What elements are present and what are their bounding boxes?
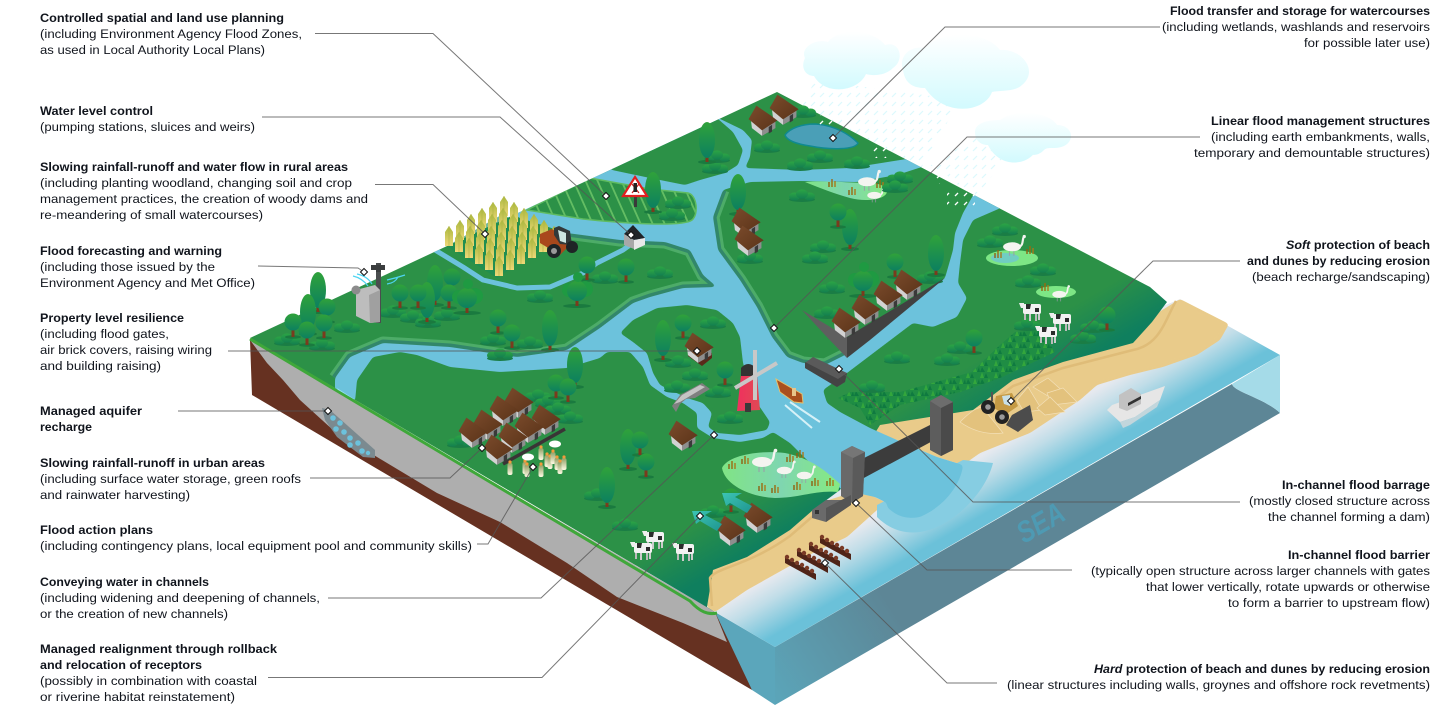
cows <box>630 303 1071 561</box>
text: slowing runoff rural: Slowing rainfall-runoff and water flow in rural areas <box>40 160 348 174</box>
text: flood barrage: In-channel flood barrage <box>1282 478 1430 492</box>
text: soft protection <box>1247 238 1430 284</box>
sea label: SEA <box>1011 496 1071 550</box>
parcel: striped field <box>527 178 696 224</box>
barrage tower: far <box>930 395 953 456</box>
grey rock layer <box>250 340 727 642</box>
text: flood transfer and storage: Flood transfer and storage for watercourses <box>1170 4 1430 18</box>
leader: forecasting <box>258 266 364 272</box>
sea: side facet <box>715 612 775 705</box>
leader: barrage <box>839 369 1240 502</box>
text: managed realignment: and relocation of receptors <box>40 658 202 672</box>
icon: reed beds by the coast <box>838 330 1055 425</box>
text: slowing runoff rural: re-meandering of small watercourses) <box>40 208 263 222</box>
leader: property resilience <box>228 350 697 352</box>
text: aquifer recharge: recharge <box>40 420 92 434</box>
icon: wheel loader <box>981 392 1033 432</box>
text: linear flood management <box>1194 114 1430 160</box>
outer fan <box>877 460 993 532</box>
text: managed realignment: or riverine habitat reinstatement) <box>40 690 235 704</box>
leader: aquifer recharge <box>178 410 328 412</box>
text: conveying water: or the creation of new channels) <box>40 607 228 621</box>
text: aquifer recharge <box>40 404 142 434</box>
text: linear flood management: temporary and demountable structures) <box>1194 146 1430 160</box>
text: flood barrier: (typically open structure across larger channels with gates <box>1091 564 1430 578</box>
rivers and channels <box>335 116 1003 518</box>
leader: rural runoff <box>375 184 485 234</box>
text: water level control <box>40 104 255 134</box>
text: managed realignment: Managed realignment through rollback <box>40 642 277 656</box>
sand heaps <box>960 378 1077 434</box>
text: flood transfer and storage: for possible later use) <box>1304 36 1430 50</box>
flood barrage <box>812 395 953 522</box>
text: soft protection: (beach recharge/sandscaping) <box>1252 270 1430 284</box>
river levees <box>335 190 845 378</box>
text: slowing runoff urban: and rainwater harvesting) <box>40 488 190 502</box>
text: water level control: Water level control <box>40 104 153 118</box>
text: flood forecasting: Flood forecasting and warning <box>40 244 222 258</box>
green land parcels <box>527 112 770 435</box>
text: flood barrier <box>1091 548 1430 610</box>
text: flood forecasting: (including those issued by the <box>40 260 215 274</box>
text: flood forecasting <box>40 244 255 290</box>
text: water level control: (pumping stations, sluices and weirs) <box>40 120 255 134</box>
text: hard protection: (linear structures including walls, groynes and offshore rock revetments) <box>1007 678 1430 692</box>
leader end markers <box>324 134 1014 566</box>
village road <box>503 429 565 464</box>
leader: spatial planning <box>315 34 606 196</box>
text: aquifer recharge: Managed aquifer <box>40 404 142 418</box>
text: slowing runoff urban: (including surface water storage, green roofs <box>40 472 301 486</box>
beach: south-west <box>705 490 887 612</box>
leader: barrier <box>856 503 1072 570</box>
barrage span <box>862 420 940 479</box>
icon: rollback arrows <box>692 493 752 531</box>
groynes <box>785 535 851 580</box>
leader: urban runoff <box>310 448 482 478</box>
wetland: small pool <box>1036 283 1076 301</box>
leader: soft protection <box>1011 261 1240 401</box>
parcel: river island <box>620 305 770 435</box>
wall: dark face <box>847 278 945 358</box>
text: flood forecasting: Environment Agency and Met Office) <box>40 276 255 290</box>
text: flood action plans: Flood action plans <box>40 523 153 537</box>
land surface <box>250 92 1167 612</box>
text: controlled spatial and land use planning: Controlled spatial and land use planning <box>40 11 284 25</box>
text: linear flood management: (including earth embankments, walls, <box>1211 130 1430 144</box>
demountable flood structure <box>805 357 847 387</box>
text: flood barrage: the channel forming a dam) <box>1268 510 1430 524</box>
front bright grass edge <box>250 339 717 614</box>
crop field <box>445 196 558 278</box>
leader: linear structures <box>774 137 1200 328</box>
wetland: upper river <box>805 170 887 202</box>
parcel: north-west <box>611 119 742 185</box>
text: flood barrage <box>1249 478 1430 524</box>
text: property resilience: Property level resilience <box>40 311 184 325</box>
wall: light face <box>802 310 847 358</box>
barrier control building <box>812 495 851 522</box>
text: managed realignment <box>40 642 277 704</box>
icon: flood warning sign <box>623 177 647 207</box>
houses <box>669 95 923 546</box>
beaches <box>705 299 1229 612</box>
sea block <box>715 299 1280 705</box>
icon: pumping station <box>624 225 645 250</box>
icon: footbridge <box>672 383 710 412</box>
text: slowing runoff rural: management practices, the creation of woody dams and <box>40 192 368 206</box>
property level resilience house <box>685 333 714 366</box>
icon: telecom mast, building and dish <box>352 263 405 323</box>
text: flood transfer and storage <box>1162 4 1430 50</box>
text: controlled spatial and land use planning <box>40 11 302 57</box>
brown soil layer <box>250 340 752 690</box>
text: hard protection: Hard protection of beach and dunes by reducing erosion <box>1094 662 1430 676</box>
text: conveying water: (including widening and deepening of channels, <box>40 591 320 605</box>
text: slowing runoff urban <box>40 456 301 502</box>
pond: flood storage <box>785 124 858 149</box>
text: property resilience: and building raising) <box>40 359 161 373</box>
community crowd with speech bubbles <box>508 440 566 477</box>
text: slowing runoff rural: (including planting woodland, changing soil and crop <box>40 176 352 190</box>
wetland: east pool <box>986 235 1038 266</box>
text: soft protection: and dunes by reducing erosion <box>1247 254 1430 268</box>
text: property resilience: (including flood gates, <box>40 327 169 341</box>
embankment wall <box>802 278 945 358</box>
text: soft protection: Soft protection of beach <box>1286 238 1430 252</box>
river mouth fan <box>877 460 993 532</box>
text: flood barrier: that lower vertically, rotate upwards or otherwise <box>1146 580 1430 594</box>
text: slowing runoff rural <box>40 160 368 222</box>
sea: top surface <box>715 299 1280 647</box>
leader: hard protection <box>825 563 997 683</box>
text: conveying water: Conveying water in channels <box>40 575 209 589</box>
cloud: right <box>975 113 1071 162</box>
icon: boat at sea <box>1107 386 1165 428</box>
icon: tractor <box>540 226 578 258</box>
sea: front face under water <box>775 384 1280 705</box>
leader lines <box>178 27 1240 683</box>
leader: flood transfer <box>833 27 1160 138</box>
rain over back edge <box>803 80 1005 197</box>
text: flood barrage: (mostly closed structure across <box>1249 494 1430 508</box>
cloud: centre <box>902 35 1029 109</box>
text: property resilience: air brick covers, raising wiring <box>40 343 212 357</box>
beach: north-east <box>870 299 1229 465</box>
text: hard protection <box>1007 662 1430 692</box>
clouds and rainfall <box>803 32 1071 197</box>
sea: light end face <box>1232 355 1280 413</box>
wetlands <box>722 170 1076 498</box>
text: conveying water <box>40 575 320 621</box>
stream to pumping station <box>435 245 630 288</box>
icon: aquifer recharge lens <box>322 408 375 458</box>
land cross-section: soil and rock strata <box>250 340 752 690</box>
bushes <box>274 105 1106 531</box>
text: flood action plans: (including contingency plans, local equipment pool and community skills) <box>40 539 472 553</box>
leader: water level control <box>262 117 631 235</box>
wetland: south of river <box>722 449 840 498</box>
waterfall into aquifer <box>337 388 354 400</box>
leader: managed realignment <box>268 516 700 678</box>
icon: windmill <box>735 350 777 412</box>
text: flood barrier: In-channel flood barrier <box>1288 548 1430 562</box>
text: property resilience <box>40 311 212 373</box>
text: slowing runoff urban: Slowing rainfall-runoff in urban areas <box>40 456 265 470</box>
text: flood barrier: to form a barrier to upstream flow) <box>1228 596 1430 610</box>
coastal ridge lines <box>710 301 1176 606</box>
leader: action plans <box>477 467 533 544</box>
village: urban runoff <box>459 388 565 465</box>
text: flood action plans <box>40 523 472 553</box>
cloud: left <box>803 32 900 89</box>
text: managed realignment: (possibly in combination with coastal <box>40 674 257 688</box>
barrage tower: near <box>841 446 865 503</box>
trees <box>284 122 1116 514</box>
leader: conveying water <box>328 435 714 598</box>
text: linear flood management: Linear flood management structures <box>1211 114 1430 128</box>
text: controlled spatial and land use planning: as used in Local Authority Local Plans) <box>40 43 265 57</box>
rain on land <box>815 115 975 208</box>
text: flood transfer and storage: (including wetlands, washlands and reservoirs <box>1162 20 1430 34</box>
main water network <box>335 116 1003 518</box>
icon: motor boat with wake <box>776 379 820 428</box>
text: controlled spatial and land use planning: (including Environment Agency Flood Zones, <box>40 27 302 41</box>
